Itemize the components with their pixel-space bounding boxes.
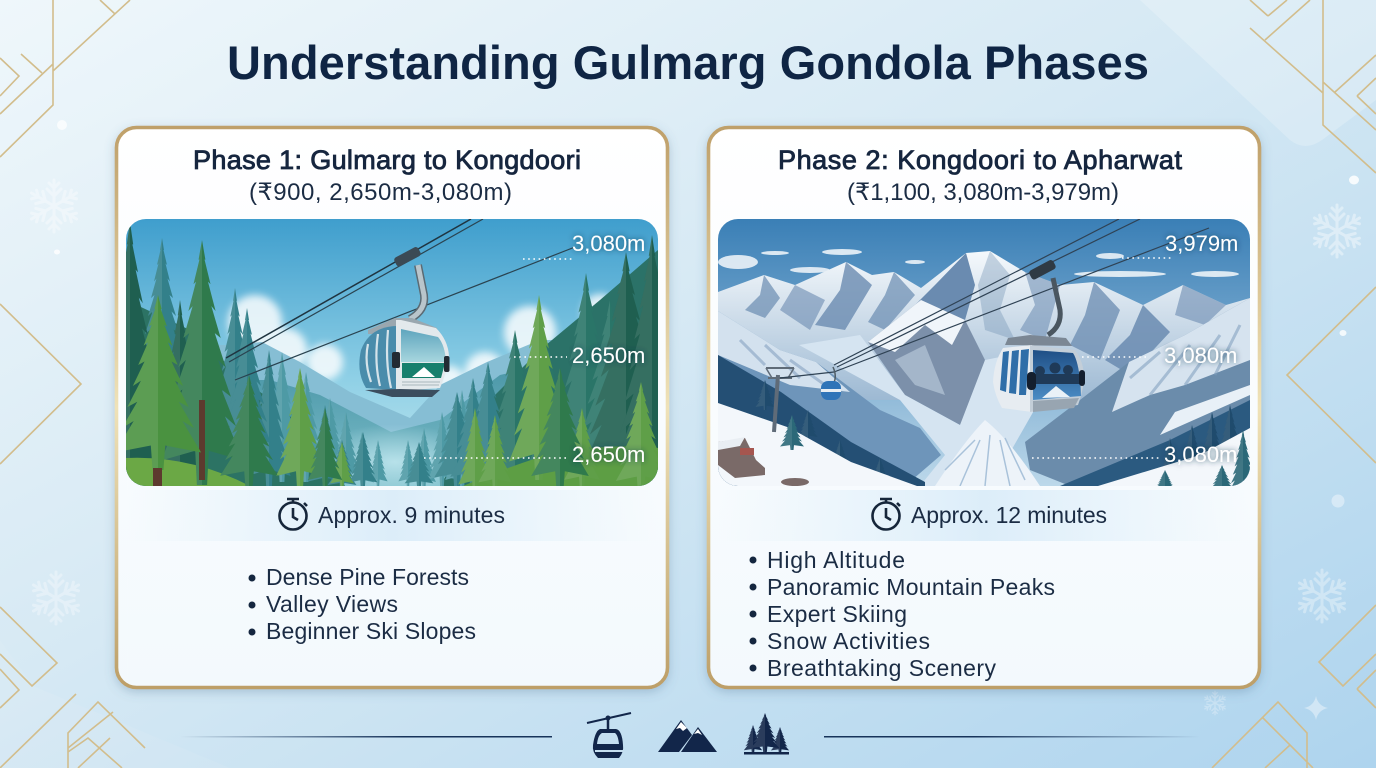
subheading phase 1: (₹900, 2,650m-3,080m) (249, 179, 512, 206)
icon: gondola cabin phase 2 (993, 259, 1085, 412)
lift tower (766, 368, 794, 432)
heading phase 1: Phase 1: Gulmarg to Kongdoori (193, 145, 581, 175)
icon: stopwatch (280, 499, 307, 530)
altitude markers phase 1: 2,650m (572, 343, 645, 368)
altitude markers phase 1 (424, 231, 645, 467)
gold geometric lines: left (0, 0, 145, 768)
duration row phase 2 (718, 490, 1250, 541)
subheading phase 2: (₹1,100, 3,080m-3,979m) (847, 179, 1119, 206)
footer divider left (180, 736, 552, 738)
back range (718, 251, 1250, 400)
duration row phase 2: Approx. 12 minutes (911, 502, 1107, 528)
altitude markers phase 2: 3,080m (1164, 343, 1237, 368)
forest masses (126, 300, 345, 486)
footer divider right (824, 736, 1200, 738)
duration row phase 1 (126, 490, 658, 541)
cables (780, 219, 1209, 378)
feature list phase 2 (750, 547, 1055, 681)
feature list phase 2: Breathtaking Scenery (767, 655, 996, 681)
panel: phase 2 (708, 128, 1260, 688)
feature list phase 1: Dense Pine Forests (266, 564, 469, 590)
icon: gondola (587, 713, 631, 758)
altitude markers phase 1: 2,650m (572, 442, 645, 467)
feature list phase 2: Panoramic Mountain Peaks (767, 574, 1055, 600)
heading phase 2: Phase 2: Kongdoori to Apharwat (778, 145, 1182, 175)
decorative snowflakes and dots (28, 120, 1363, 720)
glacier (799, 335, 1040, 486)
gold geometric lines: right (1212, 0, 1376, 768)
central massif (868, 300, 985, 425)
feature list phase 2: Snow Activities (767, 628, 930, 654)
right slope (1025, 298, 1250, 486)
feature list phase 1: Beginner Ski Slopes (266, 618, 476, 644)
pine trunk (199, 400, 205, 480)
dark forest (718, 355, 925, 486)
card frame phase 1 (116, 128, 668, 688)
duration row phase 1: Approx. 9 minutes (318, 502, 505, 528)
cables (226, 219, 575, 380)
altitude markers phase 2 (1032, 231, 1238, 467)
left slope (718, 311, 941, 486)
title: Understanding Gulmarg Gondola Phases (227, 36, 1149, 89)
card frame phase 2 (708, 128, 1260, 688)
illustration: snowy peaks gondola (718, 219, 1257, 500)
feature list phase 2: Expert Skiing (767, 601, 907, 627)
icon: gondola cabin phase 1 (359, 246, 450, 397)
icon: stopwatch (872, 499, 900, 530)
feature list phase 1 (248, 564, 476, 644)
small gondola (821, 367, 841, 400)
snow foreground (718, 403, 917, 486)
feature list phase 2: High Altitude (767, 547, 905, 573)
hut (718, 438, 765, 478)
feature list phase 1: Valley Views (266, 591, 398, 617)
panel: phase 1 (92, 128, 690, 688)
icon: mountains (658, 720, 717, 752)
altitude markers phase 1: 3,080m (572, 231, 645, 256)
altitude markers phase 2: 3,080m (1164, 442, 1237, 467)
altitude markers phase 2: 3,979m (1165, 231, 1238, 256)
illustration: pine forest gondola (126, 219, 658, 486)
icon: pine trees (744, 713, 789, 754)
